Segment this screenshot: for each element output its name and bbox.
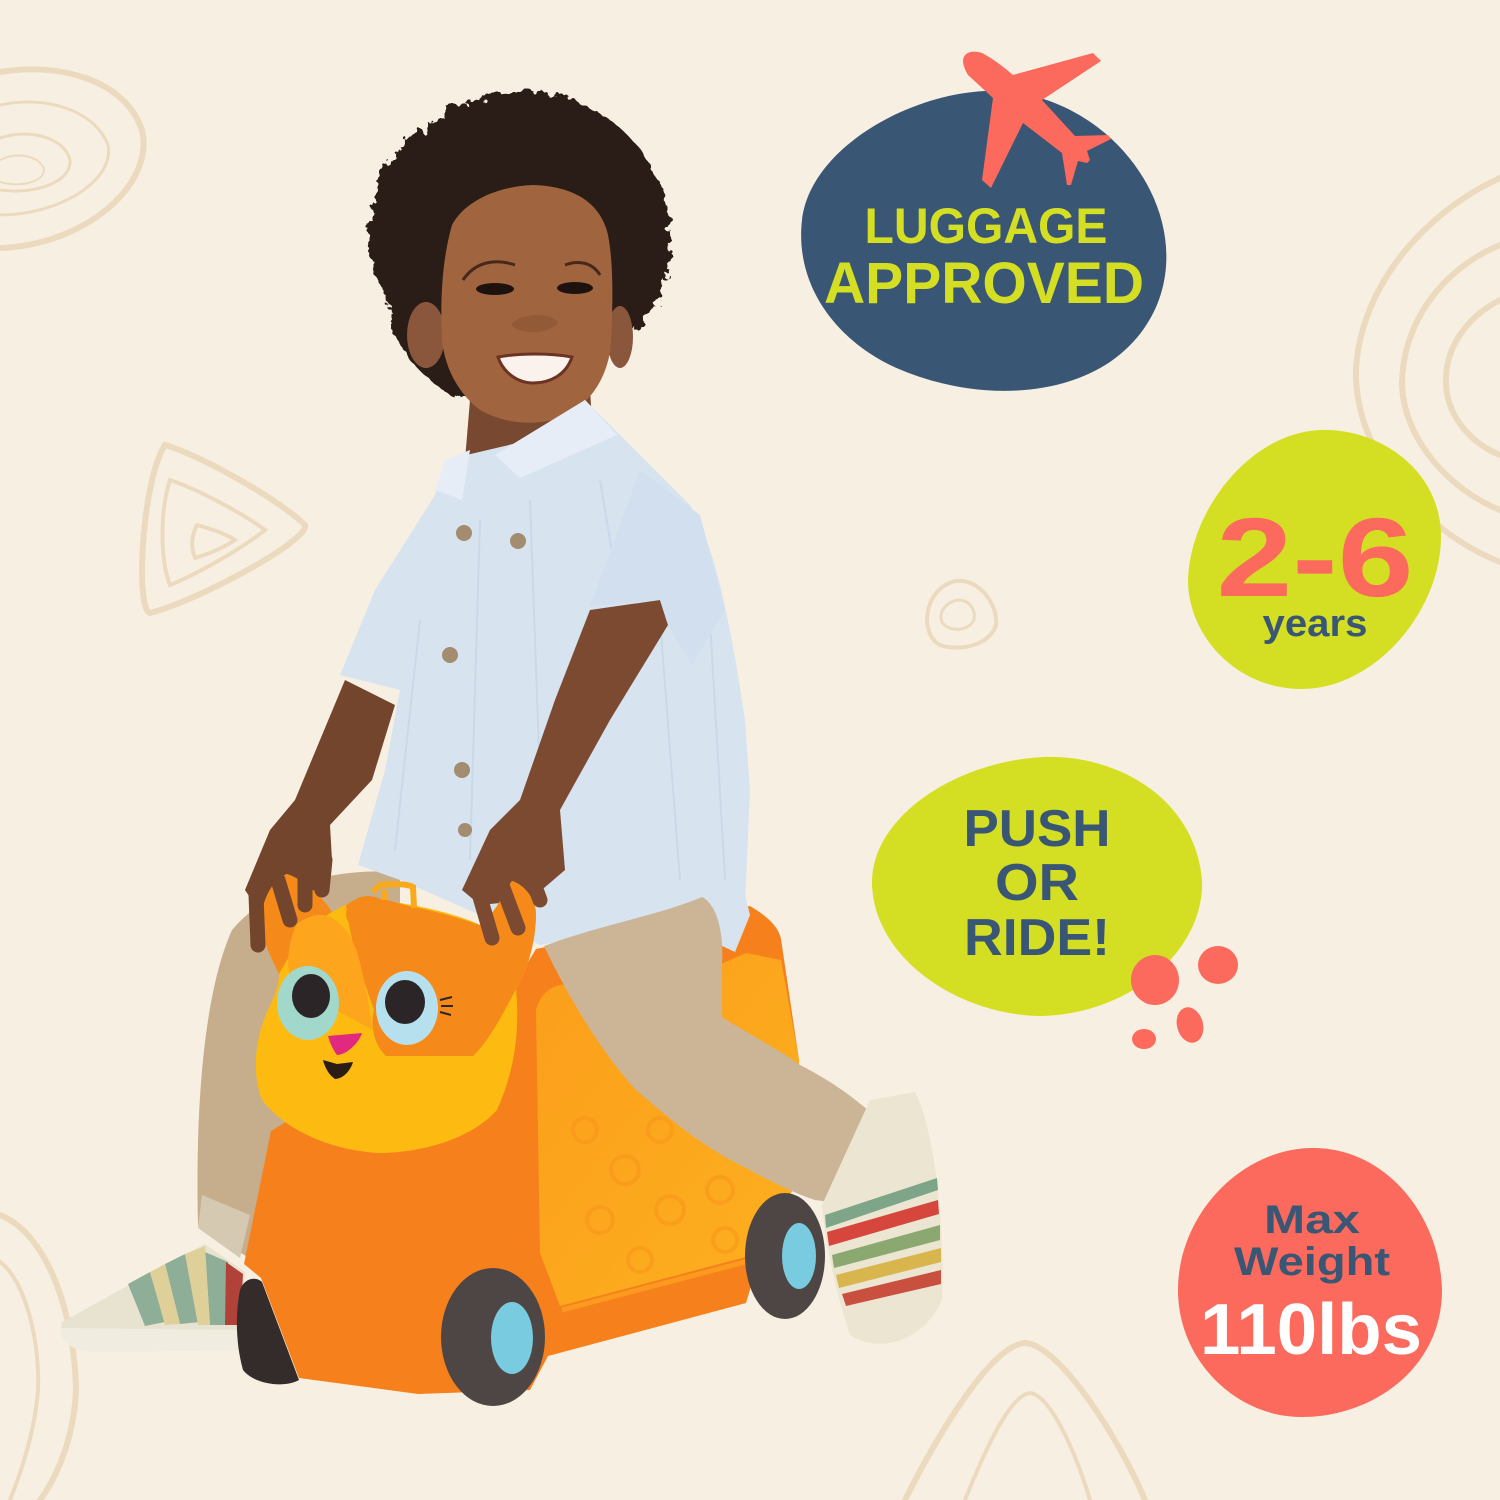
badge: age range	[1188, 430, 1441, 689]
eyes	[476, 282, 593, 295]
badge: max weight: Weight	[1234, 1240, 1390, 1284]
badge: max weight: 110lbs	[1200, 1290, 1422, 1370]
suitcase latch line	[562, 1258, 760, 1310]
far leg	[197, 871, 400, 1262]
hair	[370, 92, 670, 398]
shirt stripes	[395, 480, 725, 880]
icon: paw print	[1131, 946, 1238, 1049]
badge: max weight: Max	[1264, 1198, 1360, 1242]
patterned swirls	[573, 1118, 737, 1272]
head crown bump	[346, 896, 390, 932]
nose	[328, 1033, 362, 1055]
badge: push or ride: RIDE!	[964, 909, 1110, 967]
badge: age range: years	[1262, 603, 1368, 645]
ears	[407, 302, 633, 368]
trouser cuff	[845, 1115, 895, 1203]
suitcase back roller	[237, 1279, 299, 1384]
smile	[498, 354, 572, 383]
badge: luggage approved	[801, 52, 1166, 391]
badge: max weight	[1178, 1148, 1442, 1417]
head handle	[373, 884, 414, 908]
badge: age range: 2-6	[1216, 495, 1414, 620]
head left ear and brow	[261, 874, 332, 974]
left arm	[462, 600, 668, 905]
suitcase animal head	[256, 874, 536, 1153]
nose	[511, 315, 558, 332]
neck	[465, 390, 592, 490]
left eye	[277, 966, 339, 1040]
badge: push or ride: OR	[995, 854, 1079, 912]
shirt buttons	[442, 525, 526, 837]
badge: push or ride	[872, 757, 1202, 1016]
left hand fingers	[475, 860, 540, 938]
suitcase patterned side	[536, 953, 799, 1306]
shirt tail	[700, 890, 750, 952]
right hand fingers	[256, 860, 325, 945]
sleeve	[590, 470, 725, 665]
child riding the suitcase	[60, 92, 943, 1406]
eyelashes	[440, 997, 453, 1015]
heading: luggage approved: LUGGAGE	[864, 198, 1108, 254]
right eye	[376, 971, 453, 1045]
right arm	[245, 680, 395, 915]
shirt	[340, 400, 750, 950]
face	[441, 185, 612, 423]
collar	[435, 400, 617, 500]
far shoe	[60, 1244, 245, 1352]
suitcase body	[244, 906, 799, 1394]
far sock	[198, 1195, 250, 1258]
mouth	[323, 1060, 353, 1079]
eyebrows	[463, 262, 600, 280]
heading: luggage approved	[824, 198, 1144, 316]
front shoe	[822, 1092, 943, 1344]
suitcase rear wheel	[745, 1193, 825, 1319]
head orange mask	[346, 881, 536, 1056]
heading: luggage approved: APPROVED	[824, 251, 1144, 316]
badge: push or ride: PUSH	[964, 800, 1110, 858]
suitcase front wheel	[441, 1268, 545, 1406]
near leg	[544, 897, 895, 1202]
icon: airplane	[963, 52, 1111, 188]
